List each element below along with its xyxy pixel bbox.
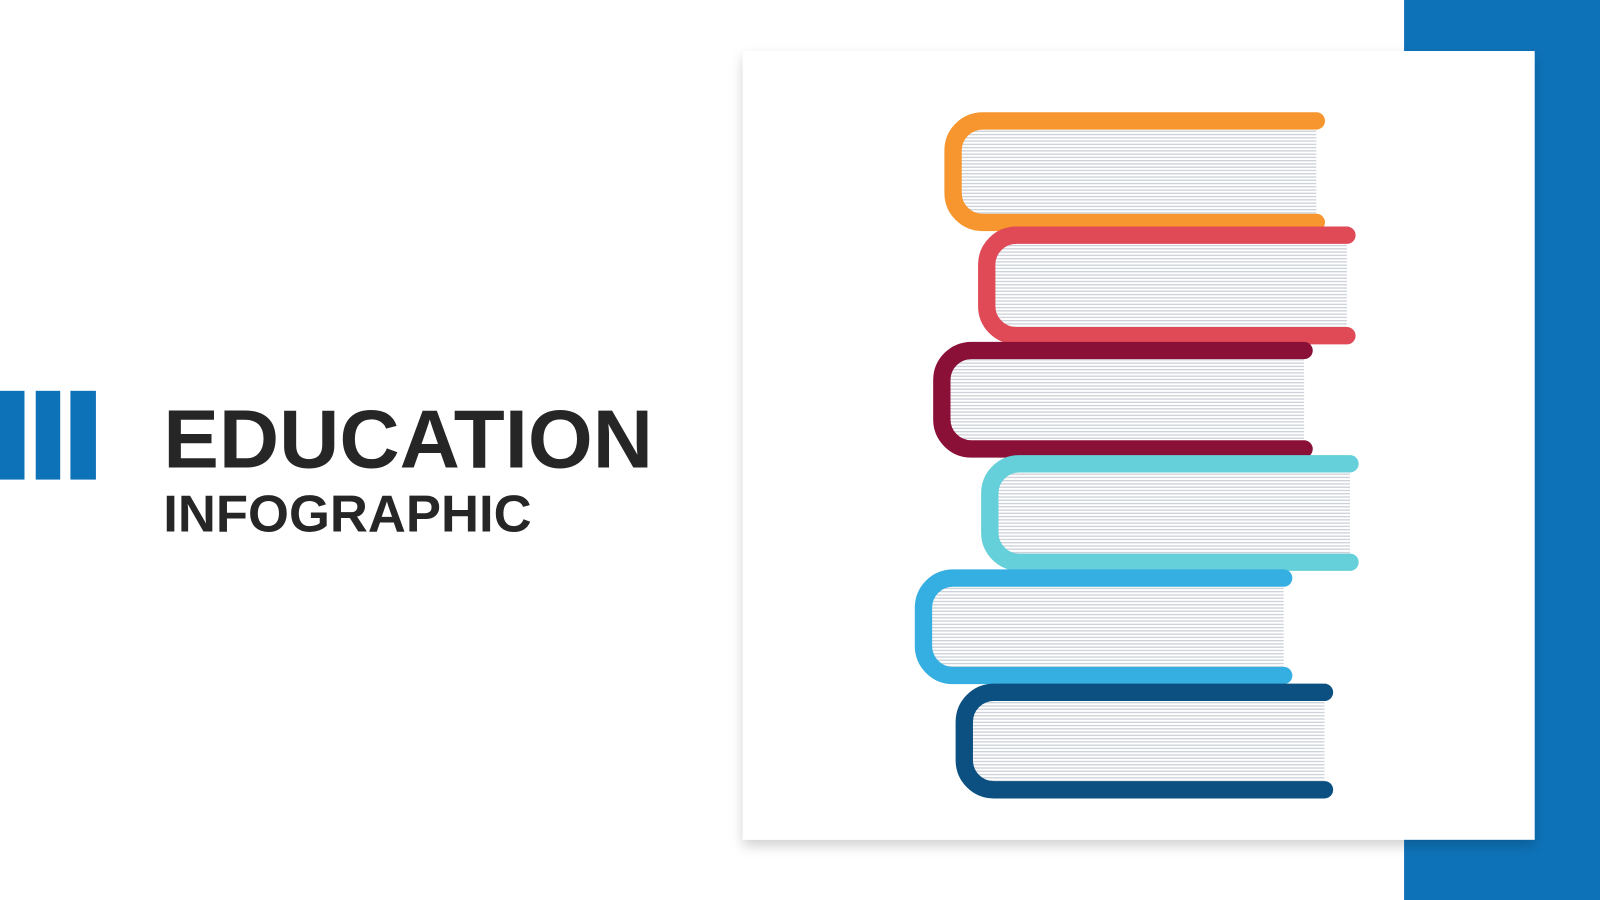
subtitle: INFOGRAPHIC (163, 486, 532, 544)
book: light blue (923, 578, 1284, 676)
book: navy (964, 692, 1324, 790)
white card panel (743, 51, 1535, 840)
book: orange (953, 121, 1316, 222)
blue background block (1404, 0, 1600, 900)
title: EDUCATION (163, 392, 653, 485)
book: maroon (942, 351, 1304, 449)
book stack illustration (923, 121, 1350, 790)
left accent bars (0, 391, 96, 480)
book: red (987, 235, 1347, 336)
book: cyan (990, 464, 1350, 562)
